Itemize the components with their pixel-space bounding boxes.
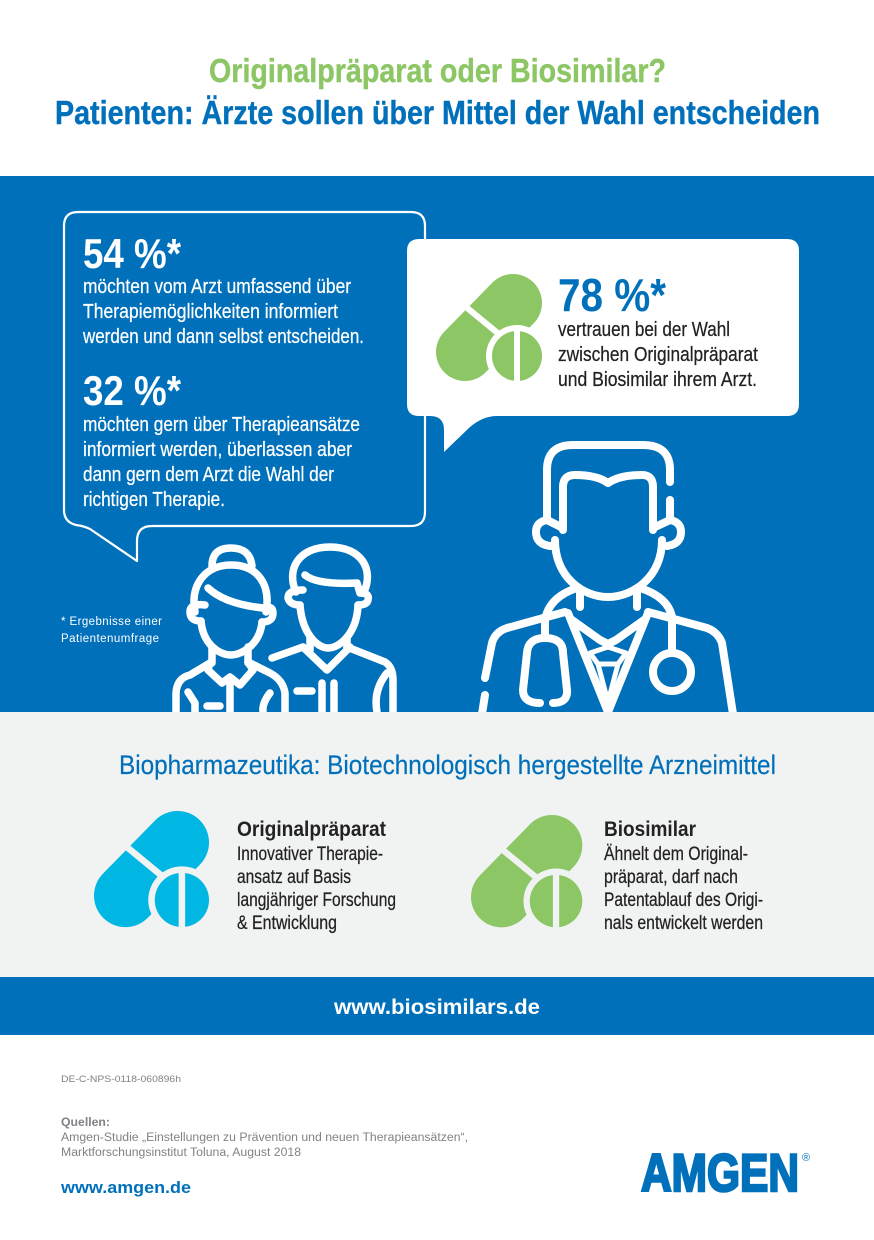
text: 32 percent description: dann gern dem Arzt die Wahl der [83, 464, 334, 486]
sources: Marktforschungsinstitut Toluna, August 2018 [61, 1147, 301, 1159]
sources: Quellen: [61, 1117, 110, 1129]
block: Originalpräparat: ansatz auf Basis [237, 867, 351, 888]
block: Originalpräparat: & Entwicklung [237, 913, 337, 934]
stat 54 percent: 54 %* [83, 230, 182, 277]
icon: doctor [482, 445, 733, 714]
text: 32 percent description: informiert werden, überlassen aber [83, 439, 352, 461]
block: Biosimilar: nals entwickelt werden [604, 913, 763, 934]
block: Biosimilar [604, 818, 763, 934]
text: 32 percent description: richtigen Therapie. [83, 489, 225, 511]
block: Originalpräparat: Innovativer Therapie- [237, 844, 383, 865]
logo: Amgen: AMGEN [641, 1144, 799, 1203]
text: 78 percent description: und Biosimilar ihrem Arzt. [558, 369, 757, 391]
text: 54 percent description: Therapiemöglichkeiten informiert [83, 301, 338, 323]
grey panel heading: Biopharmazeutika: Biotechnologisch hergestellte Arzneimittel [119, 750, 776, 780]
icon: green pill [465, 303, 548, 387]
logo: Amgen: ® [802, 1152, 810, 1164]
stat 78 percent: 78 %* [558, 269, 666, 321]
text: 54 percent description: werden und dann selbst entscheiden. [82, 326, 364, 348]
block: Originalpräparat [237, 818, 396, 934]
blue panel background [0, 176, 874, 712]
sources: Amgen-Studie „Einstellungen zu Prävention und neuen Therapieansätzen“, [61, 1132, 468, 1144]
document code: DE-C-NPS-0118-060896h [61, 1074, 181, 1085]
title: Originalpräparat oder Biosimilar? [209, 52, 666, 89]
url band [0, 977, 874, 1035]
grey panel [0, 712, 874, 977]
text: 78 percent description [558, 319, 758, 391]
block: Biosimilar: Patentablauf des Origi- [604, 890, 763, 911]
block: Biosimilar: Biosimilar [604, 818, 696, 841]
footnote: Patientenumfrage [61, 633, 159, 645]
text: 54 percent description: möchten vom Arzt umfassend über [83, 276, 351, 298]
text: 54 percent description [82, 276, 364, 348]
sources [61, 1117, 468, 1159]
stat 32 percent: 32 %* [83, 367, 182, 414]
block: Biosimilar: präparat, darf nach [604, 867, 738, 888]
footnote [61, 616, 162, 645]
block: Originalpräparat: Originalpräparat [237, 818, 386, 841]
doctor speech bubble [407, 239, 799, 452]
footnote: * Ergebnisse einer [61, 616, 162, 628]
block: Originalpräparat: langjähriger Forschung [237, 890, 396, 911]
text: 78 percent description: vertrauen bei der Wahl [558, 319, 730, 341]
text: 78 percent description: zwischen Originalpräparat [558, 344, 758, 366]
icon: female patient [176, 548, 285, 712]
title [55, 52, 820, 131]
icon: blue pill [125, 842, 216, 934]
text: 32 percent description: möchten gern über Therapieansätze [83, 414, 360, 436]
patient speech bubble [64, 212, 425, 561]
icon: male patient [272, 547, 393, 712]
block: Biosimilar: Ähnelt dem Original- [604, 844, 748, 865]
text: 32 percent description [83, 414, 360, 511]
icon: green pill biosimilar [501, 845, 589, 934]
website link: www.amgen.de [60, 1178, 191, 1197]
url band: www.biosimilars.de [333, 996, 540, 1019]
